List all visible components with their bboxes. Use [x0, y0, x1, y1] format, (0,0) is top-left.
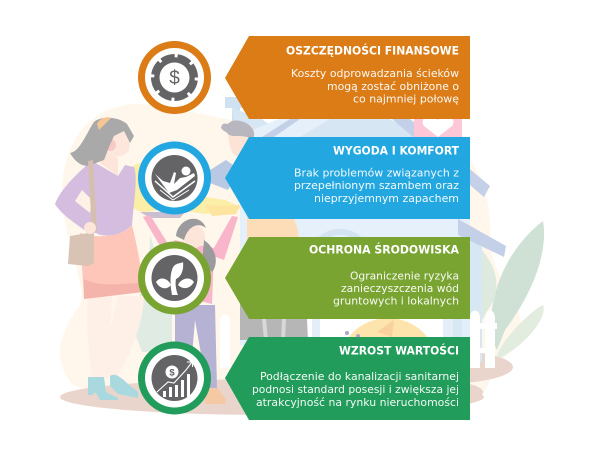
background illustration: family in front of house — [55, 92, 544, 418]
banner shape green — [225, 337, 470, 420]
house — [225, 92, 506, 362]
body text: Ograniczenie ryzyka — [350, 270, 459, 282]
body text: Koszty odprowadzania ścieków — [291, 67, 459, 80]
heading: WZROST WARTOŚCI — [339, 342, 459, 358]
body text: zanieczyszczenia wód — [341, 282, 459, 295]
body text: przepełnionym szambem oraz — [294, 179, 459, 192]
icon: poker chip with dollar — [138, 41, 211, 114]
plants — [130, 221, 544, 358]
icon: poker chip with dollar: $ — [169, 68, 180, 89]
icon: person relaxing on mattress — [138, 142, 211, 214]
body text: atrakcyjność na rynku nieruchomości — [256, 396, 459, 409]
panel: Oszczędności finansowe — [138, 36, 470, 119]
body text: nieprzyjemnym zapachem — [314, 192, 459, 205]
heading: OSZCZĘDNOŚCI FINANSOWE — [286, 42, 459, 58]
body text — [252, 370, 459, 409]
body text — [294, 166, 459, 205]
body text: Podłączenie do kanalizacji sanitarnej — [260, 370, 459, 383]
woman — [55, 117, 144, 400]
body text — [291, 67, 459, 106]
body text: Brak problemów związanych z — [294, 166, 459, 180]
child — [143, 215, 238, 404]
icon: rising chart with coin: $ — [169, 368, 175, 378]
chick — [338, 318, 438, 418]
cream background blob — [60, 104, 521, 400]
banner shape orange — [225, 36, 470, 119]
panel: Ochrona środowiska — [138, 237, 470, 319]
icon: sprout — [138, 242, 211, 314]
body text: podnosi standard posesji i zwiększa jej — [252, 383, 459, 396]
heading: WYGODA I KOMFORT — [333, 144, 459, 158]
body text: mogą zostać obniżone o — [327, 80, 459, 93]
heading: OCHRONA ŚRODOWISKA — [309, 242, 460, 256]
ground shadow — [60, 350, 513, 415]
large key held up — [123, 162, 242, 218]
man behind — [210, 121, 308, 340]
fence — [220, 310, 497, 368]
body text: co najmniej połowę — [353, 92, 459, 106]
panel: Wygoda i komfort — [138, 137, 470, 219]
panel: Wzrost wartości — [138, 337, 470, 420]
body text — [333, 270, 459, 308]
banner shape blue — [225, 137, 470, 219]
body text: gruntowych i lokalnych — [333, 294, 459, 308]
icon: rising chart with coin — [138, 342, 211, 414]
banner shape olive green — [225, 237, 470, 319]
